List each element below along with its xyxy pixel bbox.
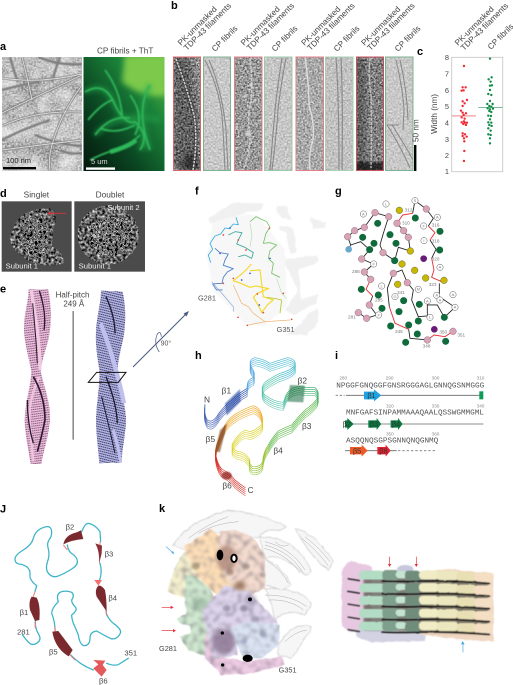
subunit 1 label: Subunit 1 (79, 262, 111, 271)
column labels: PK-unmasked (176, 4, 219, 47)
residue numbers: 310 (402, 220, 410, 225)
residue letters: A (439, 297, 442, 302)
strand labels: β1 (222, 386, 231, 396)
strand β1 (364, 389, 381, 401)
residue numbers: 281 (348, 314, 356, 319)
panel d (0, 188, 145, 272)
column labels: CP fibrils (393, 24, 422, 53)
residue numbers: 345 (395, 329, 403, 334)
glycine residues (344, 206, 456, 343)
column labels: TDP-43 filaments (306, 1, 357, 52)
residue letters: M (417, 287, 420, 292)
strand β6: β6 (379, 446, 388, 455)
grey density envelope (207, 203, 327, 335)
y axis ticks: 8 (445, 53, 449, 62)
caption: CP fibrils + ThT (97, 46, 153, 56)
backbone bonds: red (366, 213, 453, 340)
singlet density slice (2, 201, 72, 272)
y axis title: Width (nm) (430, 94, 439, 134)
y axis ticks: 6 (445, 86, 449, 95)
red points (460, 65, 468, 162)
half-pitch label: Half-pitch (56, 290, 89, 299)
column labels: TDP-43 filaments (366, 1, 417, 52)
y axis ticks: 4 (445, 118, 449, 128)
sequence row 2 (343, 404, 485, 430)
plot frame (452, 57, 503, 172)
sequence row 3: ASQQNQSGPSGNNQNQGNMQ (346, 437, 439, 445)
panel c: width scatter plot (417, 1, 513, 176)
residue letters (362, 198, 457, 320)
micrograph pair 2 (234, 57, 292, 170)
column labels: TDP-43 filaments (245, 1, 296, 52)
beta sheet β3 (95, 543, 102, 564)
strand labels: β2 (66, 523, 74, 532)
strand labels: C (248, 485, 254, 495)
sequence row 3: 350 (386, 431, 394, 436)
label d: d (0, 188, 7, 200)
cavities (217, 550, 253, 667)
strand labels (17, 523, 137, 685)
scale label: 100 nm (6, 156, 31, 165)
doublet density slice (74, 201, 145, 272)
residue numbers: 312 (405, 208, 413, 213)
residue numbers (348, 208, 465, 349)
hydrophobic residues (360, 197, 458, 320)
strand labels: β2 (298, 375, 307, 385)
surface dimples (192, 563, 267, 645)
sequence row 3 (345, 431, 440, 457)
column labels: PK-unmasked (300, 4, 343, 47)
red arrow (50, 212, 66, 215)
dark interior (364, 577, 488, 634)
beta sheet β2 (63, 530, 83, 544)
beta sheet β4 (94, 580, 107, 612)
arginine residue (345, 246, 352, 253)
micrograph pair 4 (356, 57, 413, 171)
label G351: G351 (279, 665, 297, 674)
y axis ticks: 2 (445, 151, 449, 160)
strands β2 β3 β4 (343, 418, 403, 430)
y axis ticks: 7 (445, 70, 449, 78)
sequence row 1 (336, 375, 485, 401)
half-pitch label: 249 Å (63, 299, 85, 308)
strands β2 β3 β4: β4 (392, 420, 400, 429)
strand labels: β4 (108, 594, 118, 603)
micrograph pair 3 (296, 57, 353, 170)
panel a (0, 41, 168, 171)
strand labels: β4 (273, 445, 283, 455)
micrograph pair 1 (174, 57, 230, 170)
sequence row 2: 330 (432, 404, 440, 409)
contour lines (188, 517, 330, 642)
back layers (342, 561, 493, 642)
strand labels: β5 (49, 647, 58, 656)
strand labels: β6 (222, 481, 232, 491)
panel g: schematic of residues (335, 186, 465, 349)
strand labels: β3 (302, 421, 312, 431)
column labels: CP fibrils (332, 24, 361, 53)
proline residues (420, 255, 438, 333)
ribbon stack (205, 358, 318, 496)
beta sheet β1 (29, 597, 40, 621)
panel j: cartoon backbone (0, 503, 137, 685)
scatter in zoom coordinates (452, 57, 503, 162)
strand labels (204, 375, 312, 495)
residue letters: A (452, 292, 455, 297)
heading doublet: Doublet (96, 190, 125, 200)
column labels (176, 1, 422, 53)
strand β1: β1 (367, 391, 376, 400)
column labels: CP fibrils (210, 24, 239, 53)
residue letters: F (372, 261, 375, 266)
sequence row 1: NPGGFGNQGGFGNSRGGGAGLGNNQGSNMGGG (336, 382, 485, 390)
arrow red upper (162, 606, 174, 609)
residue letters: F (377, 312, 380, 317)
panel b (171, 0, 422, 171)
residue numbers: 285 (375, 298, 383, 303)
label j: J (0, 503, 6, 515)
strand labels: 351 (124, 649, 137, 658)
column labels: PK-unmasked (239, 4, 282, 47)
filament: doublet purple (96, 291, 126, 463)
polar residues (358, 214, 449, 346)
sequence row 1: 300 (432, 375, 440, 380)
arrow blue (166, 547, 174, 554)
rotation symbol 90°: 90° (161, 339, 171, 347)
rotation symbol 90° (156, 332, 171, 352)
subunit 2 label: Subunit 2 (107, 203, 140, 212)
residue letters: F (422, 223, 425, 228)
methionine residues (394, 207, 447, 288)
label f: f (195, 185, 199, 197)
residue letters: L (385, 201, 388, 206)
residue letters: A (435, 293, 438, 298)
shaded interior (191, 545, 256, 654)
panel k (159, 503, 493, 675)
label c: c (417, 46, 423, 58)
strand labels: β1 (20, 608, 28, 617)
panel e (0, 283, 171, 464)
cross-section plane (88, 372, 126, 382)
strand labels: β5 (206, 434, 215, 444)
residue numbers: 288 (352, 269, 360, 274)
residue label G351: G351 (277, 325, 295, 334)
y axis ticks: 5 (445, 102, 449, 111)
label e: e (0, 283, 6, 295)
residue letters: A (454, 305, 457, 310)
fluorescence micrograph (84, 55, 168, 171)
atomic model (208, 217, 290, 325)
beta sheet β6 (93, 660, 107, 677)
residue numbers: 316 (432, 223, 440, 228)
label k: k (159, 503, 166, 515)
strand labels: 281 (17, 627, 30, 636)
cyan coil (15, 523, 128, 670)
label a: a (0, 41, 7, 53)
median line: PK-unmasked (452, 115, 476, 117)
scale bar 50 nm (412, 119, 420, 171)
strand β5: β5 (353, 446, 361, 455)
sequence row 1: 290 (386, 375, 394, 380)
surface model cross-section (159, 510, 333, 675)
green points (486, 57, 494, 145)
residue numbers: 348 (423, 344, 431, 349)
column labels: TDP-43 filaments (459, 1, 510, 52)
y axis ticks: 1 (445, 167, 449, 176)
y axis ticks: 3 (445, 135, 449, 144)
heading singlet: Singlet (24, 190, 50, 200)
residue numbers: 318 (432, 239, 440, 244)
residue numbers: 350 (439, 329, 448, 334)
sequence row 2: 340 (477, 404, 485, 409)
oxygen and nitrogen atoms (219, 227, 293, 326)
column labels: TDP-43 filaments (182, 1, 233, 52)
column labels: PK-unmasked (360, 4, 403, 47)
median line: CP fibrils (478, 106, 503, 109)
arrow from filament to panel f (133, 311, 189, 367)
residue letters: S (414, 198, 417, 203)
stacked beta-rungs (348, 570, 493, 634)
strand labels: β3 (105, 550, 113, 559)
residue letters: I (423, 238, 425, 243)
panel h: stacked ribbon model (195, 350, 318, 496)
pink coil ends (33, 542, 107, 660)
residue letters: A (362, 211, 365, 216)
backbone bonds: black (348, 201, 455, 340)
coloured surface regions (168, 528, 285, 675)
label h: h (195, 350, 202, 362)
residue numbers: 351 (457, 332, 465, 337)
sequence row 3: 360 (432, 431, 440, 436)
scale label: 5 um (91, 157, 108, 166)
residue letters: L (429, 315, 432, 320)
residue letters: A (436, 215, 439, 220)
sequence row 2: MNFGAFSINPAMMAAAQAALQSSWGMMGML (346, 410, 484, 418)
subunit label: Subunit 1 (6, 262, 38, 271)
residue letters: G (393, 294, 397, 299)
half-pitch line (72, 311, 74, 440)
scale bar 50 nm: 50 nm (412, 119, 420, 142)
sequence row 1: 280 (339, 375, 347, 380)
label i: i (335, 350, 338, 362)
column labels: PK-unmasked (453, 4, 496, 47)
strands β2 β3 β4: β3 (370, 420, 378, 429)
residue numbers: 341 (397, 290, 405, 295)
strands β2 β3 β4: β2 (343, 420, 351, 429)
filament: singlet pink (24, 289, 51, 464)
blue arrow (461, 641, 465, 652)
label g: g (335, 186, 342, 198)
panel f: density map with atomic model (195, 185, 327, 335)
micrograph: negative stain fibrils (2, 57, 82, 171)
column labels: CP fibrils (270, 24, 299, 53)
residue letters: A (439, 265, 442, 270)
residue numbers: 323 (429, 282, 437, 287)
half-pitch label (56, 290, 89, 308)
residue letters: A (426, 298, 429, 303)
label G281: G281 (159, 644, 177, 653)
residue numbers: 320 (432, 256, 440, 261)
red arrow right (415, 557, 418, 567)
sequence row 1: 310 (477, 375, 485, 380)
beta sheet β5 (52, 631, 73, 656)
strand labels: N (204, 394, 210, 404)
y axis ticks (445, 53, 449, 176)
residue letters: L (381, 283, 384, 288)
sequence row 2: 320 (386, 404, 394, 409)
residue label G281: G281 (198, 294, 216, 303)
outer grey density (173, 510, 333, 658)
red arrow left (388, 557, 391, 567)
label b: b (171, 0, 178, 12)
arrow red lower (162, 629, 176, 632)
surface model side view (342, 557, 493, 652)
panel i: sequence map (335, 350, 485, 457)
